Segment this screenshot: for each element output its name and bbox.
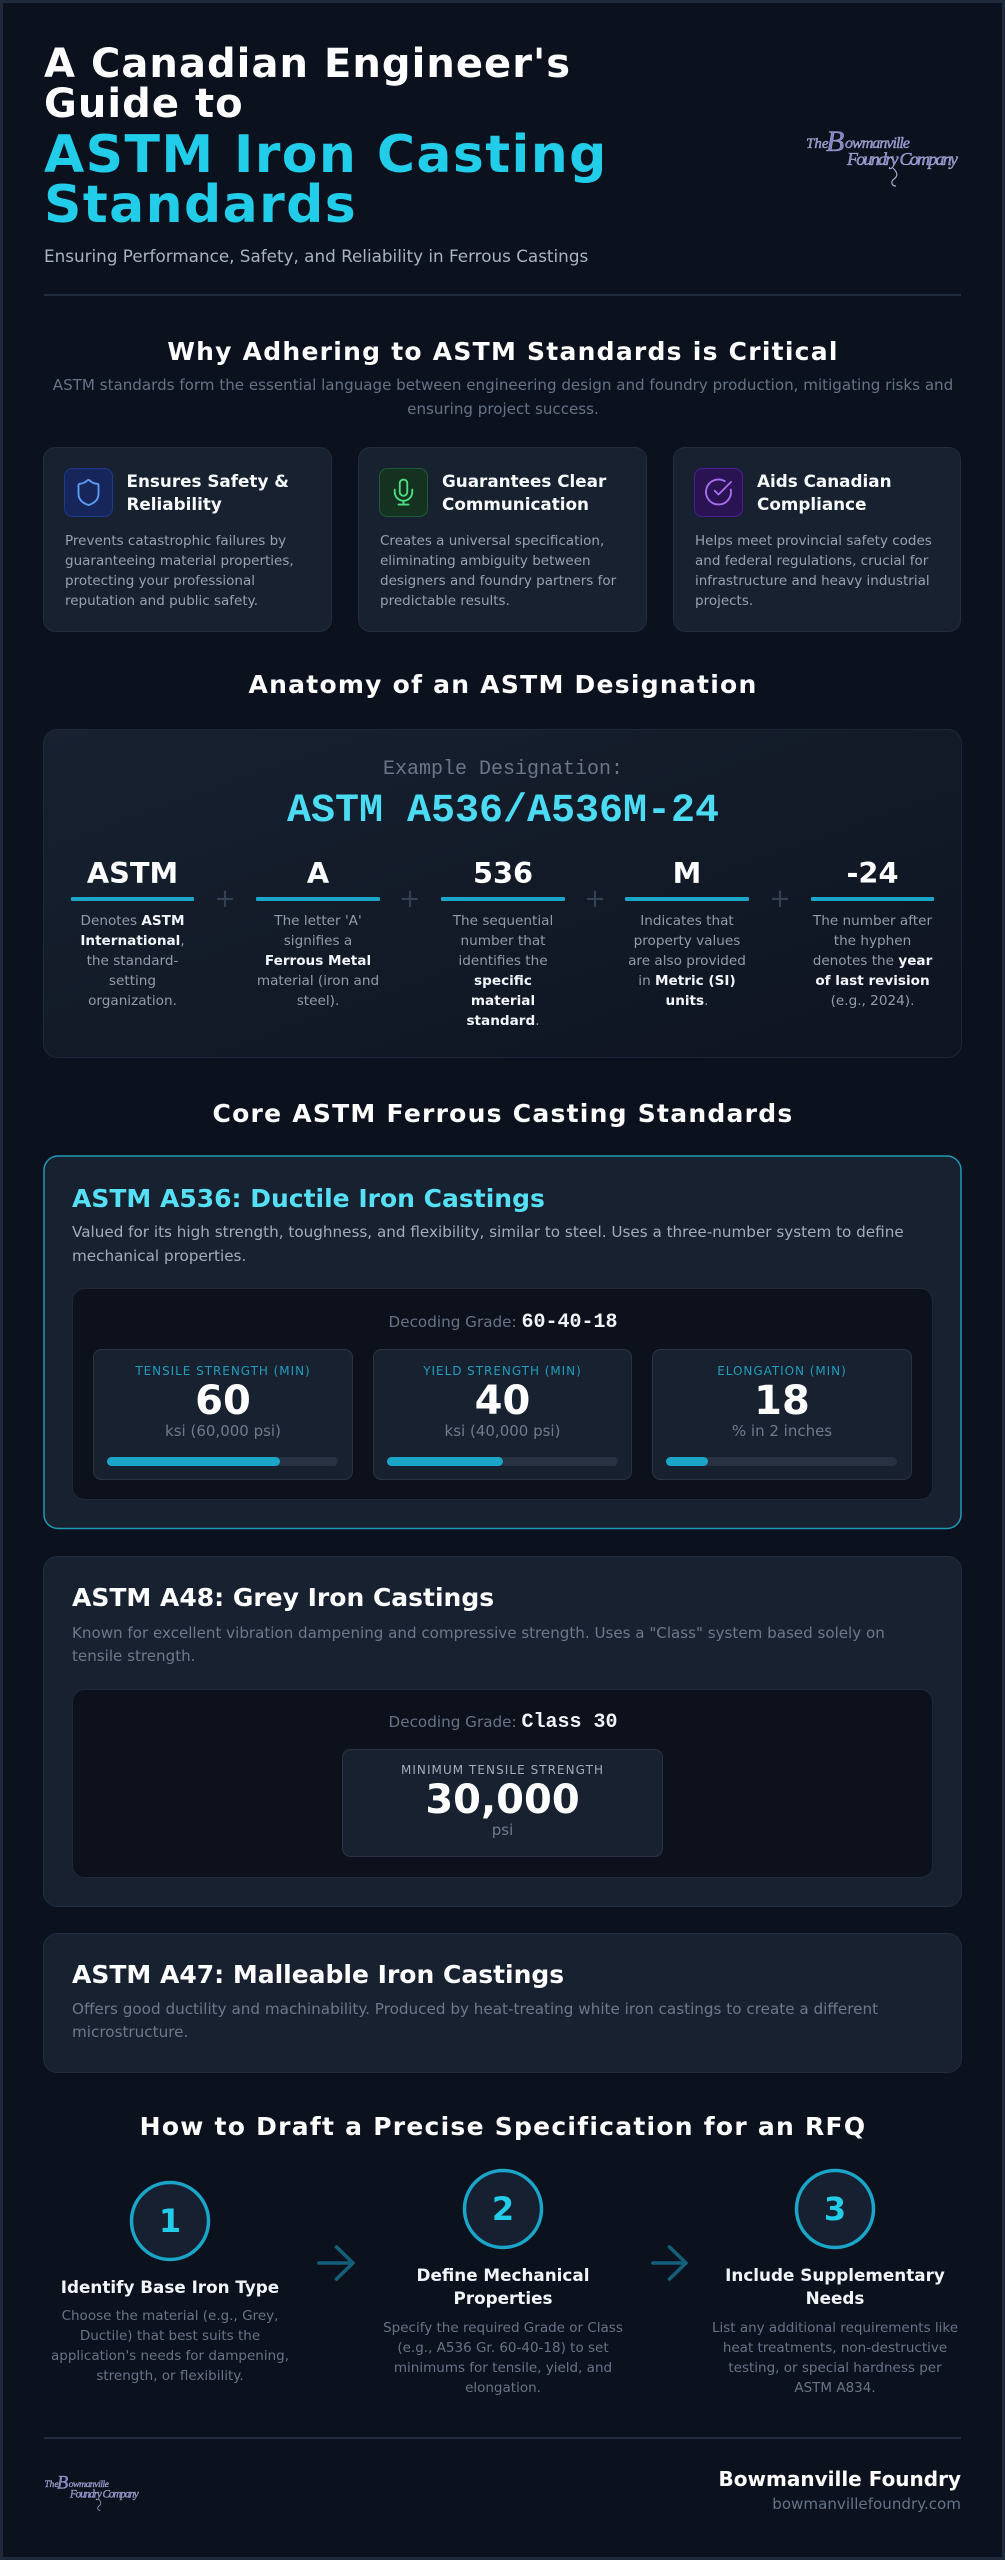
heading: anatomy: Anatomy of an ASTM Designation bbox=[248, 670, 758, 699]
grade label: Decoding Grade: Class 30 bbox=[389, 1711, 617, 1734]
example label: Example Designation: bbox=[383, 758, 623, 781]
part: -24: (e.g., 2024). bbox=[831, 993, 914, 1009]
panel: A536 bbox=[44, 1156, 961, 1528]
part: A: steel). bbox=[297, 993, 339, 1009]
part: M: units. bbox=[666, 993, 708, 1009]
A536 heading: ASTM A536: Ductile Iron Castings bbox=[72, 1184, 545, 1213]
step 2 bbox=[383, 2170, 623, 2396]
part: 536: 536 bbox=[473, 856, 533, 890]
stat: minimum tensile: 30,000 bbox=[425, 1777, 580, 1823]
logo: Bowmanville Foundry Company: B bbox=[826, 125, 844, 158]
card text: Creates a universal specification, bbox=[380, 533, 604, 549]
title: Standards bbox=[44, 175, 357, 235]
step 1: 1 bbox=[159, 2202, 181, 2240]
part: M: M bbox=[673, 856, 701, 890]
stat: tensile: ksi (60,000 psi) bbox=[165, 1422, 281, 1440]
step 1 bbox=[51, 2182, 289, 2384]
card heading bbox=[126, 471, 289, 514]
step 3: testing, or special hardness per bbox=[728, 2360, 942, 2376]
part: 536: material bbox=[471, 993, 535, 1009]
footer logo: The bbox=[44, 2480, 58, 2490]
part: M: are also provided bbox=[628, 953, 746, 969]
logo: Bowmanville Foundry Company: Foundry Company bbox=[846, 149, 958, 169]
card text: guaranteeing material properties, bbox=[65, 553, 294, 569]
panel: designation anatomy bbox=[44, 730, 962, 1058]
icon: check circle bbox=[694, 468, 742, 516]
arrow bbox=[319, 2247, 353, 2279]
card heading: Ensures Safety & bbox=[126, 471, 289, 491]
footer logo bbox=[44, 2473, 139, 2510]
A47 description: microstructure. bbox=[72, 2023, 188, 2041]
footer logo: B bbox=[57, 2473, 68, 2494]
part: M: Indicates that bbox=[640, 913, 734, 929]
panel: A47 bbox=[44, 1934, 962, 2072]
step 2: minimums for tensile, yield, and bbox=[394, 2360, 612, 2376]
footer brand bbox=[719, 2467, 961, 2513]
card text: Prevents catastrophic failures by bbox=[65, 533, 286, 549]
step 2: Properties bbox=[454, 2288, 552, 2308]
card text: designers and foundry partners for bbox=[380, 573, 617, 589]
stat: yield: YIELD STRENGTH (MIN) bbox=[422, 1364, 582, 1378]
footer brand: bowmanvillefoundry.com bbox=[772, 2495, 961, 2513]
step 1: Choose the material (e.g., Grey, bbox=[62, 2308, 278, 2324]
intro text: ASTM standards form the essential language between engineering design and foundry production, mitigating risks and bbox=[53, 376, 953, 394]
part: ASTM: setting bbox=[109, 973, 156, 989]
card text bbox=[695, 533, 932, 609]
card text: protecting your professional bbox=[65, 573, 255, 589]
stat: yield: 40 bbox=[475, 1378, 530, 1424]
card text: infrastructure and heavy industrial bbox=[695, 573, 930, 589]
A48 description bbox=[72, 1624, 885, 1665]
arrow bbox=[653, 2247, 686, 2279]
footer logo: owmanville bbox=[69, 2479, 110, 2490]
panel: compliance card bbox=[674, 448, 960, 632]
card text: and federal regulations, crucial for bbox=[695, 553, 929, 569]
part: -24: denotes the year bbox=[813, 953, 933, 969]
plus: + bbox=[214, 884, 236, 914]
part: 536: identifies the bbox=[458, 953, 548, 969]
part: 536: number that bbox=[461, 933, 545, 949]
step 2: 2 bbox=[492, 2190, 514, 2228]
A48 description: Known for excellent vibration dampening and compressive strength. Uses a "Class" system based solely on bbox=[72, 1624, 885, 1642]
step 3: Include Supplementary bbox=[725, 2265, 945, 2285]
A536 description: Valued for its high strength, toughness, and flexibility, similar to steel. Uses a three-number system to define bbox=[72, 1223, 904, 1241]
part: ASTM: Denotes ASTM bbox=[80, 913, 184, 929]
part: A: Ferrous Metal bbox=[265, 953, 371, 969]
card heading bbox=[442, 471, 607, 514]
stat: tensile bbox=[94, 1350, 352, 1480]
part: M bbox=[625, 856, 749, 1009]
part: 536: The sequential bbox=[452, 913, 553, 929]
intro text: ensuring project success. bbox=[407, 400, 599, 418]
title: Guide to bbox=[44, 81, 244, 127]
card text: projects. bbox=[695, 593, 753, 609]
card text bbox=[380, 533, 617, 609]
step 1: Identify Base Iron Type bbox=[61, 2277, 279, 2297]
panel: communication card bbox=[358, 448, 646, 632]
stat: elongation: 18 bbox=[754, 1378, 810, 1424]
part: 536 bbox=[441, 856, 565, 1029]
grade decoder bbox=[72, 1690, 932, 1878]
card text: reputation and public safety. bbox=[65, 593, 258, 609]
part: -24: of last revision bbox=[815, 973, 930, 989]
step 1: strength, or flexibility. bbox=[96, 2368, 244, 2384]
card heading: Guarantees Clear bbox=[442, 471, 607, 491]
heading: why adhering: Why Adhering to ASTM Standards is Critical bbox=[167, 337, 839, 366]
part: ASTM: International, bbox=[80, 933, 185, 949]
logo: Bowmanville Foundry Company: The bbox=[806, 136, 829, 152]
part: -24: -24 bbox=[846, 856, 899, 890]
A536 description bbox=[72, 1223, 904, 1265]
icon: microphone bbox=[380, 468, 428, 516]
stat: tensile: TENSILE STRENGTH (MIN) bbox=[134, 1364, 311, 1378]
stat: tensile: 60 bbox=[195, 1378, 251, 1424]
stat: elongation: ELONGATION (MIN) bbox=[717, 1364, 847, 1378]
intro text bbox=[53, 376, 953, 418]
footer brand: Bowmanville Foundry bbox=[719, 2467, 961, 2491]
step 2: Define Mechanical bbox=[417, 2265, 589, 2285]
panel: safety card bbox=[44, 448, 332, 632]
stat: yield bbox=[374, 1350, 632, 1480]
stat: minimum tensile bbox=[342, 1750, 662, 1856]
part: 536: specific bbox=[474, 973, 532, 989]
title: ASTM Iron Casting bbox=[44, 125, 608, 185]
plus: + bbox=[769, 884, 791, 914]
stat: elongation: % in 2 inches bbox=[732, 1422, 832, 1440]
stat: minimum tensile: psi bbox=[492, 1821, 513, 1839]
part: 536: standard. bbox=[466, 1013, 540, 1029]
A48 description: tensile strength. bbox=[72, 1647, 195, 1665]
card heading: Communication bbox=[442, 494, 589, 514]
part: -24 bbox=[811, 856, 934, 1009]
step 2: (e.g., A536 Gr. 60-40-18) to set bbox=[397, 2340, 609, 2356]
title bbox=[44, 41, 608, 235]
step 3: 3 bbox=[824, 2190, 846, 2228]
heading: how to draft: How to Draft a Precise Specification for an RFQ bbox=[140, 2112, 866, 2141]
step 1: Ductile) that best suits the bbox=[80, 2328, 260, 2344]
plus: + bbox=[584, 884, 606, 914]
step 3 bbox=[712, 2170, 958, 2396]
logo: Bowmanville Foundry Company: owmanville bbox=[845, 135, 910, 152]
part: -24: The number after bbox=[812, 913, 932, 929]
title: A Canadian Engineer's bbox=[44, 41, 571, 87]
footer logo: Foundry Company bbox=[69, 2488, 139, 2500]
card text bbox=[65, 533, 294, 609]
card heading: Reliability bbox=[126, 494, 222, 514]
panel: A48 bbox=[44, 1556, 962, 1906]
part: A: A bbox=[307, 856, 330, 890]
part: ASTM: ASTM bbox=[87, 856, 178, 890]
part: -24: the hyphen bbox=[834, 933, 911, 949]
step 3: heat treatments, non-destructive bbox=[723, 2340, 947, 2356]
part: M: in Metric (SI) bbox=[638, 973, 736, 989]
icon: shield bbox=[64, 468, 112, 516]
A47 description bbox=[72, 2000, 878, 2041]
A47 description: Offers good ductility and machinability. Produced by heat-treating white iron castings to create a different bbox=[72, 2000, 878, 2018]
card text: predictable results. bbox=[380, 593, 510, 609]
step 2: elongation. bbox=[465, 2380, 541, 2396]
step 2: Specify the required Grade or Class bbox=[383, 2320, 623, 2336]
card heading: Aids Canadian bbox=[757, 471, 892, 491]
step 3: List any additional requirements like bbox=[712, 2320, 958, 2336]
grade decoder bbox=[72, 1288, 932, 1500]
stat: yield: ksi (40,000 psi) bbox=[445, 1422, 560, 1440]
part: A: The letter 'A' bbox=[273, 913, 362, 929]
card text: Helps meet provincial safety codes bbox=[695, 533, 932, 549]
A48 heading: ASTM A48: Grey Iron Castings bbox=[72, 1583, 494, 1612]
part: A: signifies a bbox=[284, 933, 352, 949]
A47 heading: ASTM A47: Malleable Iron Castings bbox=[72, 1960, 564, 1989]
part: A bbox=[256, 856, 380, 1009]
grade label: Decoding Grade: 60-40-18 bbox=[389, 1311, 617, 1334]
card heading bbox=[757, 471, 892, 514]
part: ASTM: the standard- bbox=[87, 953, 179, 969]
part: M: property values bbox=[634, 933, 740, 949]
subtitle: Ensuring Performance, Safety, and Reliability in Ferrous Castings bbox=[44, 246, 588, 266]
part: A: material (iron and bbox=[257, 973, 379, 989]
plus: + bbox=[399, 884, 421, 914]
example designation: ASTM A536/A536M-24 bbox=[287, 789, 719, 834]
logo: Bowmanville Foundry Company bbox=[806, 125, 958, 186]
card heading: Compliance bbox=[757, 494, 866, 514]
part: ASTM: organization. bbox=[88, 993, 177, 1009]
step 1: application's needs for dampening, bbox=[51, 2348, 289, 2364]
A536 description: mechanical properties. bbox=[72, 1247, 246, 1265]
card text: eliminating ambiguity between bbox=[380, 553, 591, 569]
stat: minimum tensile: MINIMUM TENSILE STRENGTH bbox=[401, 1763, 604, 1777]
heading: core standards: Core ASTM Ferrous Casting Standards bbox=[212, 1099, 794, 1128]
stat: elongation bbox=[652, 1350, 912, 1480]
step 3: ASTM A834. bbox=[794, 2380, 876, 2396]
part: ASTM bbox=[71, 856, 194, 1009]
step 3: Needs bbox=[806, 2288, 864, 2308]
